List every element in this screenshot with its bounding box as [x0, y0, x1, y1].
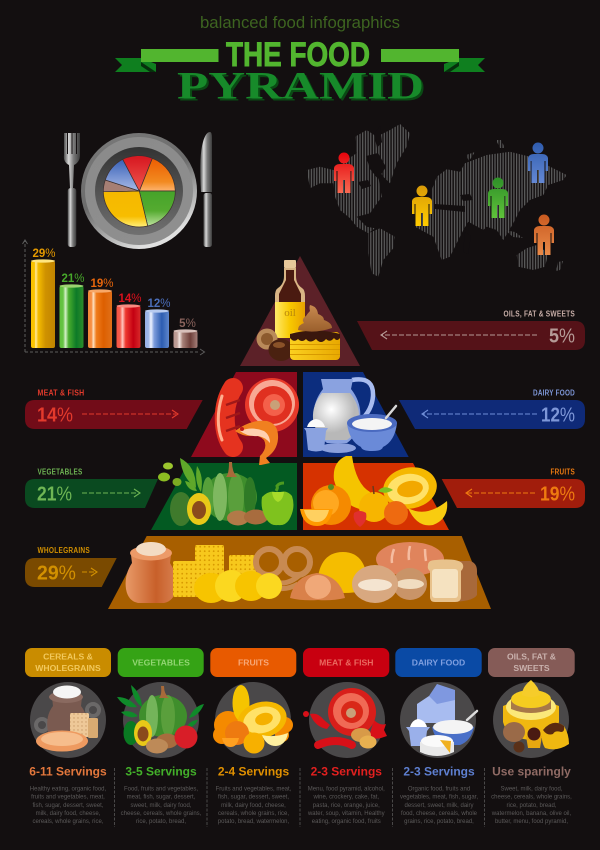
title line one: THE FOOD: [226, 36, 370, 74]
button: [25, 648, 111, 677]
food: oils and sweets: [256, 260, 340, 361]
servings: 2-4 Servings: [218, 764, 290, 778]
bar: meat and fish 14%: [116, 293, 142, 348]
description: rice, potato, bread,: [136, 819, 186, 825]
icon: knife: [200, 132, 212, 247]
plate pie chart: [81, 133, 197, 249]
label: DAIRY FOOD: [533, 388, 575, 398]
milk jug: [313, 379, 373, 453]
button: FRUITS: [238, 658, 269, 668]
button: [488, 648, 575, 677]
food: wholegrains: [126, 542, 477, 603]
servings: 3-5 Servings: [125, 764, 197, 778]
description: [400, 786, 478, 825]
sausage: [225, 388, 233, 447]
description: cheese, cereals, whole grains,: [491, 795, 572, 801]
icon: sack and bread: [30, 682, 106, 758]
banana: [334, 456, 374, 510]
bar: oils 5%: 5%: [179, 318, 196, 330]
steak: [245, 378, 299, 432]
servings: 2-3 Servings: [403, 764, 475, 778]
banner: fruits: [442, 468, 585, 508]
chart axes: [22, 240, 204, 355]
tier: wholegrains: [108, 536, 491, 609]
description: Fruits and vegetables, meat,: [216, 786, 292, 792]
description: meat, fish, sugar, dessert,: [127, 795, 196, 801]
tier: dairy: [303, 372, 409, 457]
tangerine: [384, 501, 408, 525]
icon: dairy: [400, 682, 477, 758]
label: VEGETABLES: [38, 468, 83, 476]
label: WHOLEGRAINS: [38, 546, 90, 555]
bar: wholegrains 29%: 29%: [32, 248, 56, 260]
tier: fruits: [303, 463, 449, 530]
bun: [317, 552, 368, 593]
croissant: [290, 573, 345, 600]
description: [216, 786, 292, 825]
chocolates: [256, 328, 294, 361]
orange: [311, 484, 351, 525]
description: Healthy eating, organic food,: [30, 786, 107, 792]
bar: dairy 12%: 12%: [147, 298, 171, 310]
description: cereals, whole grains, rice,: [32, 819, 104, 825]
servings: 2-3 Servings: [311, 764, 382, 778]
pretzel: [256, 549, 310, 589]
title line two: PYRAMID: [177, 64, 424, 108]
category column: fruits: [210, 648, 296, 825]
crackers: [173, 545, 256, 597]
melon: [380, 463, 440, 513]
banner: oils fat and sweets: [357, 310, 585, 350]
description: dessert, sweet, milk, dairy: [404, 803, 474, 809]
layered cake: [290, 305, 340, 360]
description: fish, sugar, dessert, sweet,: [32, 803, 104, 809]
green pepper: [262, 483, 293, 525]
tier: oils fat sweets: [240, 256, 360, 366]
label: FRUITS: [550, 468, 575, 476]
description: Organic food, fruits and: [408, 786, 470, 792]
banner: wholegrains: [25, 546, 117, 587]
category column: dairy food: [395, 648, 482, 825]
title line two: PYRAMID: [179, 66, 426, 110]
description: [491, 786, 572, 825]
arrow: [466, 489, 535, 497]
icon: meat: [303, 682, 387, 758]
description: butter, menu, food pyramid,: [495, 819, 568, 825]
description: Food, fruits and vegetables,: [124, 786, 198, 792]
whole avocado: [170, 492, 192, 526]
button: WHOLEGRAINS: [35, 663, 101, 673]
percentage: 14%: [37, 404, 73, 426]
description: [307, 786, 385, 825]
button: SWEETS: [513, 663, 550, 673]
percentage: 21%: [37, 484, 72, 506]
description: vegetables, meat, fish, sugar,: [400, 795, 478, 801]
ribbon banner left: [115, 49, 218, 72]
person: yellow: [412, 186, 432, 226]
description: rice, potato, bread,: [506, 803, 557, 809]
banner: vegetables: [25, 468, 158, 508]
bar: fruits 19%: [88, 278, 114, 348]
food: dairy: [304, 379, 397, 453]
servings: 6-11 Servings: [29, 764, 107, 778]
orange slice: [300, 509, 333, 526]
bar: oils 5%: [174, 318, 198, 348]
apple: [359, 486, 393, 522]
button: CEREALS &: [43, 652, 93, 662]
description: cheese, cereals, whole grains,: [121, 811, 202, 817]
percentage: 29%: [37, 562, 76, 584]
category column: vegetables: [117, 648, 204, 825]
category column: cereals and wholegrains: [25, 648, 111, 825]
percentage: 19%: [540, 484, 575, 506]
avocado half: [187, 493, 211, 525]
melon slice: [408, 501, 447, 525]
person icons on map: [334, 142, 554, 255]
description: Sweet, milk, dairy food,: [500, 786, 563, 792]
braided bread: [194, 570, 282, 603]
food: vegetables: [158, 458, 293, 526]
description: watermelon, banana, olive oil,: [491, 811, 572, 817]
ribbon banner right: [381, 49, 485, 72]
bar: wholegrains 29%: [31, 248, 56, 348]
description: eating, organic food, fruits: [312, 819, 381, 825]
description: water, soup, vitamin, Healthy: [307, 811, 385, 817]
tier: vegetables: [151, 463, 297, 530]
button: OILS, FAT &: [507, 652, 556, 662]
pumpkin: [202, 462, 257, 521]
loaf: [376, 542, 444, 576]
description: pasta, rice, orange, juice,: [313, 803, 380, 809]
arrow: [82, 410, 178, 418]
percentage: 5%: [549, 326, 575, 348]
button: MEAT & FISH: [319, 658, 373, 668]
icon: sweets: [493, 680, 569, 758]
food: fruits: [300, 456, 447, 527]
button: DAIRY FOOD: [412, 658, 465, 668]
label: MEAT & FISH: [38, 388, 84, 397]
title block: [115, 13, 485, 110]
description: Menu, food pyramid, alcohol,: [308, 786, 385, 792]
description: potato, bread, watermelon,: [218, 819, 290, 825]
person: green: [488, 178, 508, 218]
toast loaf: [428, 559, 477, 602]
percentage: 12%: [541, 404, 575, 426]
leaves and branch: [158, 458, 202, 492]
button: VEGETABLES: [132, 658, 190, 668]
yogurt cup: [304, 419, 328, 452]
description: [121, 786, 202, 825]
bar: vegetables 21%: [60, 273, 85, 348]
second roll: [393, 568, 427, 600]
bar: fruits 19%: 19%: [90, 278, 114, 290]
description: food, cheese, cereals, whole: [401, 811, 478, 817]
description: grains, rice, potato, bread,: [404, 819, 474, 825]
flour sack: [126, 542, 176, 603]
description: fruits and vegetables, meat,: [31, 795, 105, 801]
arrow: [381, 331, 537, 339]
button: [118, 648, 204, 677]
description: fish, sugar, dessert, sweet,: [218, 795, 289, 801]
person: red: [334, 152, 354, 193]
button: [210, 648, 296, 677]
world map: [307, 124, 567, 277]
description: cereals, whole grains, rice,: [218, 811, 289, 817]
category column: oils fat and sweets: [488, 648, 575, 825]
bar: dairy 12%: [145, 298, 171, 348]
icon: fruits: [213, 682, 293, 758]
person: orange: [534, 214, 554, 255]
icon: fork: [64, 132, 80, 247]
pyramid: [108, 256, 491, 609]
description: milk, dairy food, cheese,: [221, 803, 286, 809]
arrow: [82, 489, 140, 497]
bar: vegetables 21%: 21%: [61, 273, 85, 285]
description: sweet, milk, dairy food,: [130, 803, 192, 809]
banner: meat and fish: [25, 388, 203, 429]
oil bottle: oil: [284, 307, 296, 319]
button: [395, 648, 482, 677]
fish: [235, 421, 278, 465]
arrow: [422, 410, 537, 418]
person: blue: [528, 142, 548, 183]
category column: meat and fish: [303, 648, 389, 825]
sausage highlight and grill marks: [218, 396, 240, 440]
food: meat and fish: [218, 378, 299, 465]
description: [30, 786, 107, 825]
strawberry: [354, 511, 366, 527]
subtitle: balanced food infographics: [200, 13, 400, 32]
bar: meat and fish 14%: 14%: [118, 293, 142, 305]
button: [303, 648, 389, 677]
icon: vegetables: [117, 682, 204, 758]
description: wine, crockery, cake, fat,: [313, 795, 379, 801]
servings: Use sparingly: [492, 764, 571, 778]
tier: meat and fish: [191, 372, 297, 457]
potatoes: [227, 510, 268, 526]
banner: dairy food: [399, 388, 585, 429]
arrow: [82, 568, 97, 576]
cottage cheese bowl: [347, 406, 397, 451]
first roll: [352, 565, 398, 603]
bar chart: [22, 240, 204, 355]
description: milk, dairy food, cheese,: [36, 811, 101, 817]
label: OILS, FAT & SWEETS: [504, 310, 575, 318]
